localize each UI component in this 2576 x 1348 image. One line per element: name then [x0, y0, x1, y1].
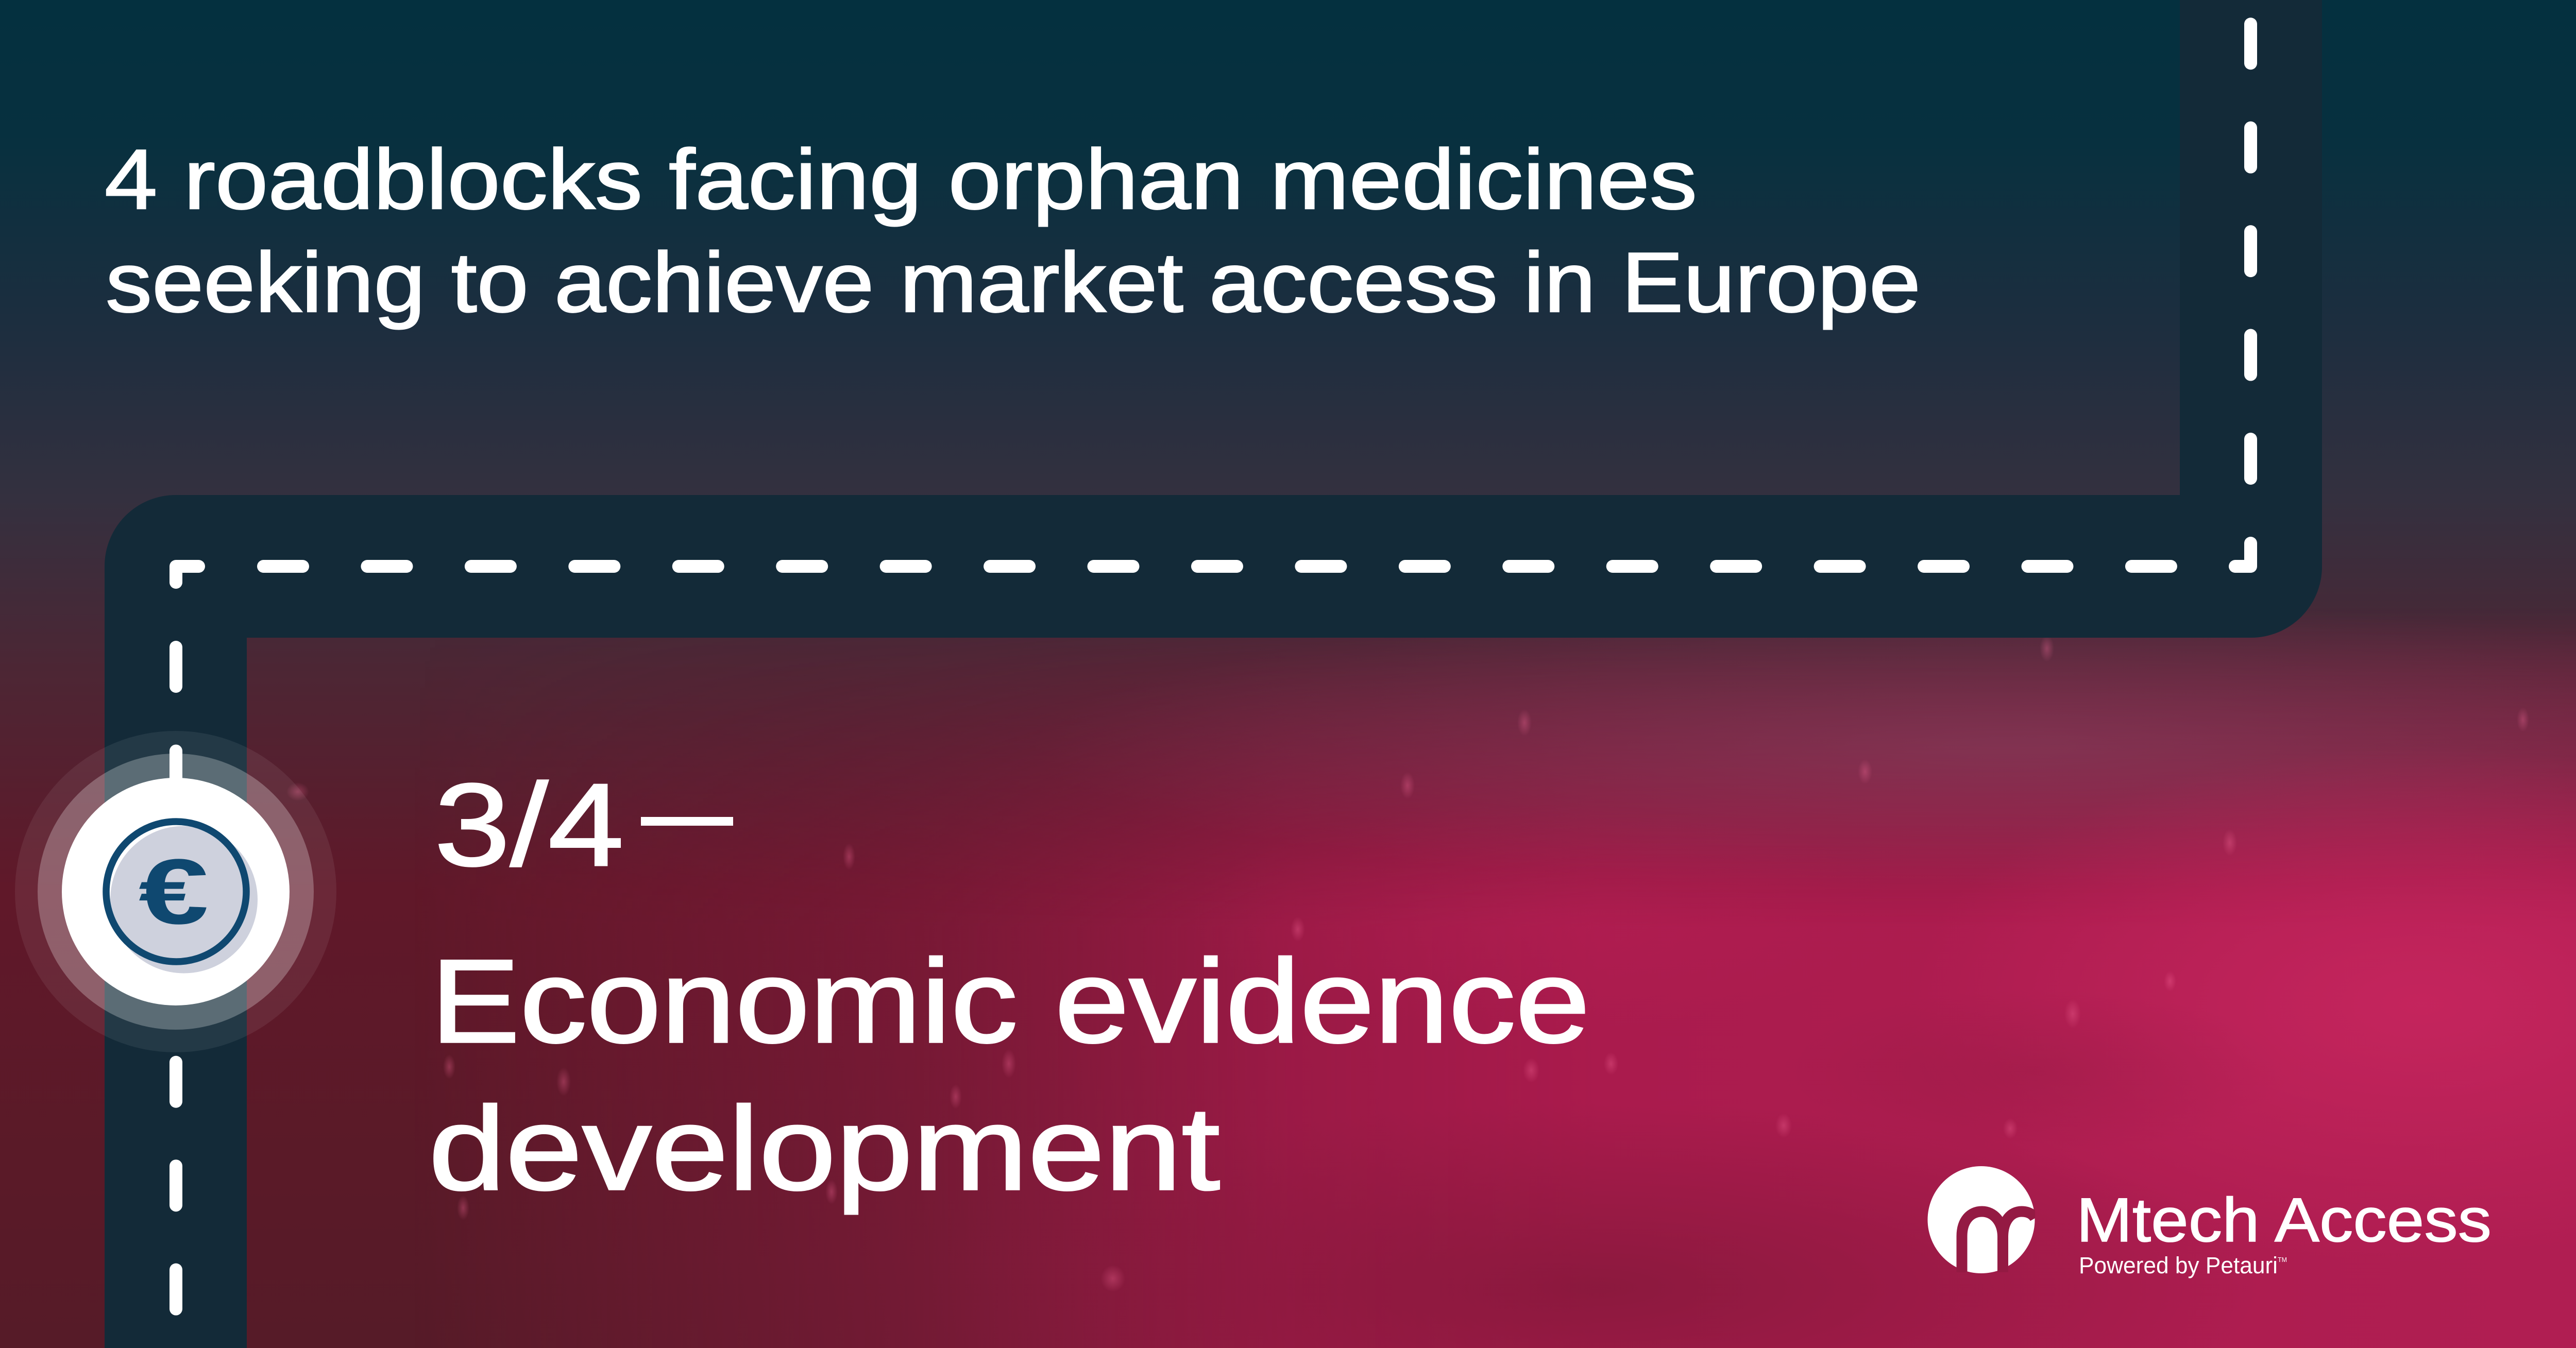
step marker with euro icon: [15, 731, 336, 1052]
title: [105, 132, 1921, 330]
heading: Economic evidence development: development: [429, 1082, 1220, 1215]
step number 3/4: [434, 760, 733, 891]
logo: Mtech Access: TM: [2278, 1256, 2287, 1264]
title: seeking to achieve market access in Europe: [106, 235, 1921, 330]
heading: Economic evidence development: Economic evidence: [431, 935, 1590, 1067]
title: 4 roadblocks facing orphan medicines: [105, 132, 1697, 227]
logo: Mtech Access: Mtech Access: [2076, 1185, 2492, 1255]
step number 3/4: 3/4: [434, 760, 624, 891]
logo mark: [1928, 1166, 2035, 1273]
logo: Mtech Access: [1928, 1166, 2492, 1278]
logo: Mtech Access: Powered by Petauri: [2079, 1252, 2278, 1278]
icon: euro coin: [106, 822, 258, 974]
road centre line dashes: [176, 21, 2250, 1311]
icon: euro coin: €: [139, 840, 209, 944]
heading: Economic evidence development: [429, 935, 1590, 1215]
background speckles: [286, 635, 2529, 1292]
